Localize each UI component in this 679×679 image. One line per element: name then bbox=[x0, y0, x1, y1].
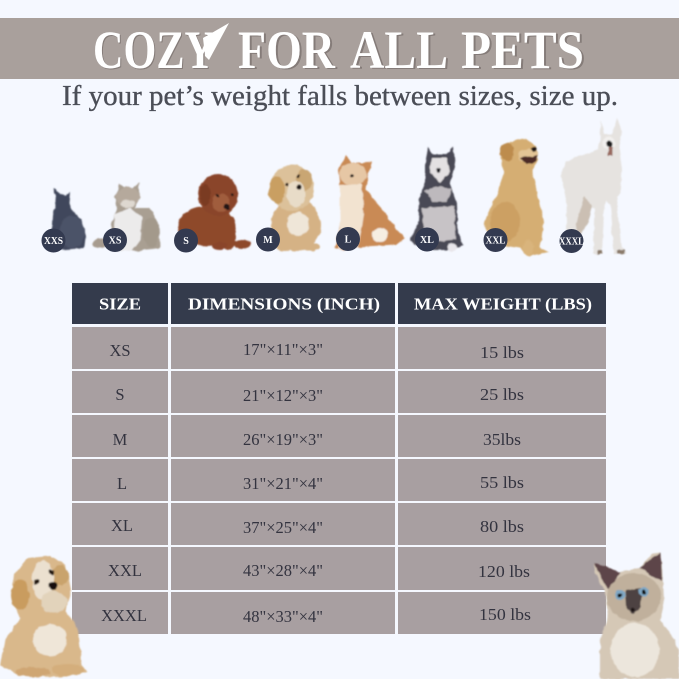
table header: MAX WEIGHT (LBS) bbox=[414, 294, 592, 314]
pet: shiba L bbox=[335, 155, 405, 250]
title: ALL bbox=[352, 21, 450, 81]
row: XL: XL bbox=[111, 516, 133, 535]
pet size lineup bbox=[42, 118, 627, 256]
badge: L bbox=[336, 227, 360, 251]
badge: XS bbox=[103, 228, 127, 252]
row: L: 55 lbs bbox=[480, 473, 524, 492]
row: XS: XS bbox=[109, 341, 131, 360]
badge: XL bbox=[415, 228, 439, 252]
row: XXL: XXL bbox=[108, 561, 142, 580]
badge: XXXL: XXXL bbox=[559, 236, 584, 248]
pet: fluffy cat XS bbox=[93, 182, 160, 251]
badge: M: M bbox=[263, 235, 273, 246]
row: XL: 37"×25"×4" bbox=[243, 518, 323, 537]
row: L: L bbox=[117, 474, 127, 493]
badge: S: S bbox=[183, 236, 189, 247]
title banner bbox=[0, 18, 679, 81]
table header bbox=[72, 283, 606, 324]
row: S: S bbox=[115, 385, 125, 404]
title: FOR bbox=[240, 21, 338, 81]
subtitle: If your pet’s weight falls between sizes, size up. bbox=[62, 80, 618, 112]
row: XXL: 43"×28"×4" bbox=[243, 561, 323, 580]
pet: white great dane XXXL bbox=[561, 118, 627, 254]
badge: XXL: XXL bbox=[486, 236, 506, 246]
row: XL: 80 lbs bbox=[480, 517, 524, 536]
row: M: 26"×19"×3" bbox=[243, 430, 323, 449]
badge: XXS bbox=[42, 228, 66, 252]
row: XXXL: XXXL bbox=[101, 606, 147, 625]
badge: XXL bbox=[484, 228, 508, 252]
row: XXL bbox=[72, 547, 606, 590]
badge: S bbox=[174, 228, 198, 252]
row: M: 35lbs bbox=[483, 430, 521, 449]
row: S: 21"×12"×3" bbox=[243, 386, 323, 405]
row: M: M bbox=[113, 430, 128, 449]
title: COZY bbox=[93, 20, 215, 80]
title: ALL bbox=[350, 20, 448, 80]
photo: siamese cat bottom-right bbox=[594, 552, 679, 679]
table header: DIMENSIONS (INCH) bbox=[188, 294, 380, 314]
row: M bbox=[72, 415, 606, 457]
row: XS bbox=[72, 327, 606, 369]
badge: XXS: XXS bbox=[44, 236, 63, 247]
badge: L: L bbox=[345, 234, 352, 246]
row: XS: 15 lbs bbox=[480, 343, 524, 362]
badge: M bbox=[256, 228, 280, 252]
badge: XS: XS bbox=[109, 236, 122, 246]
photo: havanese puppy bottom-left bbox=[0, 556, 88, 677]
title bbox=[93, 20, 586, 81]
pet: grey cat XXS bbox=[52, 188, 86, 250]
title: PETS bbox=[463, 21, 586, 81]
size table bbox=[72, 283, 606, 634]
row: XS: 17"×11"×3" bbox=[243, 340, 323, 359]
pet: havanese M bbox=[269, 165, 321, 251]
title: FOR bbox=[238, 20, 336, 80]
row: XXXL: 150 lbs bbox=[479, 605, 531, 624]
pet: husky XL bbox=[410, 147, 463, 251]
title: PETS bbox=[461, 20, 584, 80]
badge: XL: XL bbox=[420, 235, 434, 246]
row: XL bbox=[72, 503, 606, 545]
row: XXL: 120 lbs bbox=[478, 562, 530, 581]
row: XXXL bbox=[72, 592, 606, 634]
pet: brown poodle S bbox=[178, 174, 251, 250]
row: S: 25 lbs bbox=[480, 385, 524, 404]
row: L bbox=[72, 459, 606, 501]
pet: golden retriever XXL bbox=[484, 138, 548, 256]
row: L: 31"×21"×4" bbox=[243, 474, 323, 493]
row: XXXL: 48"×33"×4" bbox=[243, 607, 323, 626]
title: COZY bbox=[94, 21, 216, 81]
badge: XXXL bbox=[559, 229, 584, 253]
row: S bbox=[72, 371, 606, 413]
table header: SIZE bbox=[99, 294, 141, 314]
